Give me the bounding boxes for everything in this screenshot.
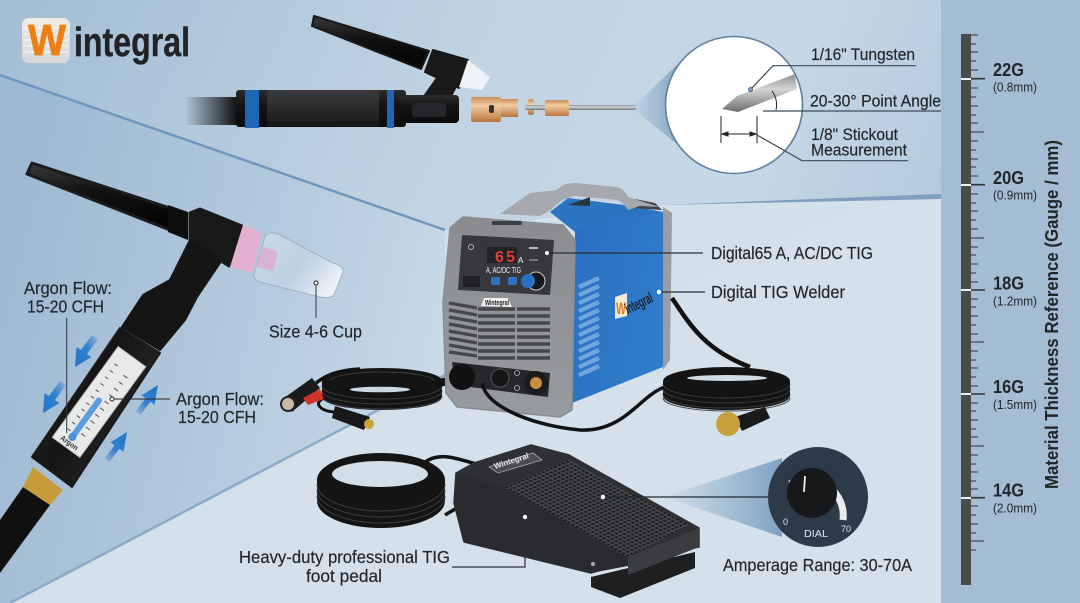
welder control panel: A: [518, 256, 524, 265]
large TIG torch with flow gauge: [0, 163, 343, 573]
gauge label: 22G: (0.8mm): [993, 79, 1037, 94]
left torch cable coil and plugs: [281, 368, 462, 430]
label: stickout measurement: 1/8" Stickout: [811, 125, 898, 144]
logo: integral: [74, 19, 190, 65]
label: argon flow left: 15-20 CFH: [27, 296, 104, 316]
gauge label: 18G: (1.2mm): [993, 293, 1037, 308]
label: cup size: Size 4-6 Cup: [269, 322, 362, 342]
label: stickout measurement: Measurement: [811, 140, 907, 160]
gauge label: 22G: 22G: [993, 60, 1024, 80]
label: argon flow left: Argon Flow:: [24, 278, 112, 298]
label: foot pedal: foot pedal: [306, 566, 382, 586]
welder rear and ground cables: [483, 298, 790, 436]
pedal brand plate: Wintegral: [493, 451, 530, 471]
label: argon flow right: [110, 389, 264, 427]
gauge label: 14G: 14G: [993, 480, 1024, 500]
flow gauge window: Argon: [59, 433, 80, 453]
welder front badge: [481, 298, 512, 307]
gauge label: 22G: [993, 60, 1037, 94]
amperage dial: 70: [841, 524, 851, 534]
label: cup size: [269, 281, 362, 342]
amperage dial: [601, 447, 868, 547]
label: 1/16 tungsten: [748, 45, 916, 92]
welder control panel: [458, 235, 554, 295]
label: digital TIG welder: [657, 282, 845, 302]
amperage dial: DIAL: [804, 529, 828, 540]
dial magnifier beam: [664, 458, 782, 537]
gauge label: 14G: (2.0mm): [993, 500, 1037, 516]
label: 1/16 tungsten: 1/16" Tungsten: [811, 45, 915, 64]
welder control panel: A, AC/DC TIG: [486, 265, 521, 275]
label: argon flow right: 15-20 CFH: [178, 407, 256, 427]
welder blue side panel: [572, 207, 672, 403]
label: foot pedal: [239, 515, 527, 586]
gauge label: 20G: (0.9mm): [993, 187, 1037, 202]
foot pedal: [454, 445, 699, 598]
foot pedal cable coil: [317, 453, 476, 528]
gauge label: 20G: 20G: [993, 168, 1024, 188]
logo: W: [28, 16, 66, 65]
welder front vents: [449, 303, 550, 358]
gauge label: 16G: 16G: [993, 377, 1024, 397]
welder machine: [443, 183, 672, 417]
gauge label: 16G: [993, 377, 1037, 412]
gauge label: 20G: [993, 168, 1037, 202]
pedal brand plate: [489, 451, 542, 473]
welder blue side panel: integral: [622, 290, 656, 318]
label: argon flow left: [24, 278, 112, 433]
gauge label: 16G: (1.5mm): [993, 397, 1037, 412]
label: digital 65A AC/DC TIG: Digital65 A, AC/DC TIG: [711, 243, 873, 263]
welder handle: [500, 183, 660, 216]
gauge label: 14G: [993, 480, 1037, 516]
tungsten detail circle: [666, 36, 802, 174]
gauge label: 18G: 18G: [993, 274, 1024, 294]
amperage dial: 0: [783, 517, 788, 527]
magnifier beam: [632, 60, 682, 148]
welder blue side panel: W: [616, 299, 627, 318]
gauge label: 18G: [993, 274, 1037, 308]
label: stickout measurement: [757, 125, 908, 161]
label: foot pedal: Heavy-duty professional TIG: [239, 547, 450, 567]
label: argon flow right: Argon Flow:: [176, 389, 264, 409]
flow gauge window: [52, 347, 146, 457]
welder control panel: 65: [495, 249, 515, 266]
top TIG torch exploded view: [185, 16, 636, 128]
blue argon flow arrows: [43, 335, 158, 462]
welder grey front: [443, 217, 575, 417]
material thickness ruler: [961, 34, 985, 585]
logo: [22, 16, 190, 65]
welder connector strip: [449, 362, 550, 397]
ruler title: Material Thickness Reference (Gauge / mm): [1042, 140, 1062, 489]
label: point angle: 20-30° Point Angle: [810, 92, 941, 110]
label: digital TIG welder: Digital TIG Welder: [711, 282, 845, 302]
label: digital 65A AC/DC TIG: [545, 243, 873, 263]
welder front badge: Wintegral: [485, 300, 509, 307]
label: amperage range: Amperage Range: 30-70A: [723, 555, 912, 575]
